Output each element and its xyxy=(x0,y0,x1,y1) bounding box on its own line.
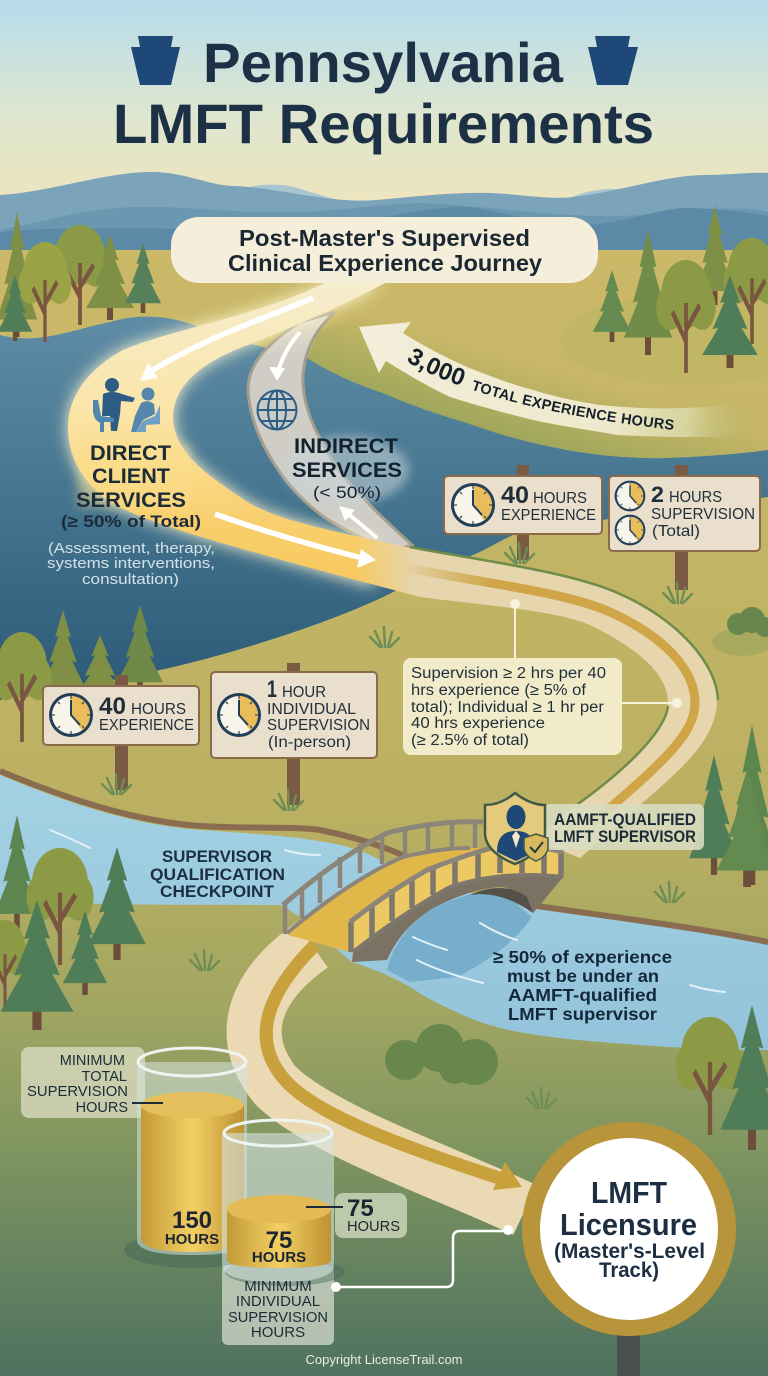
sign text: 40 xyxy=(501,482,529,509)
banner: journey heading: Clinical Experience Journey xyxy=(228,250,542,276)
label: indirect services xyxy=(285,435,409,504)
icon: keystone left xyxy=(131,36,180,85)
callout: supervision ratio: hrs experience (≥ 5% of xyxy=(411,682,587,699)
lower trail arrowhead xyxy=(493,1162,522,1190)
icon: globe xyxy=(258,390,296,430)
sign text: 1 xyxy=(267,676,277,703)
sign text: 40 xyxy=(99,693,126,720)
trail green edge xyxy=(410,547,718,804)
title line 1: Pennsylvania xyxy=(203,31,564,94)
label: 75 hours xyxy=(306,1193,407,1238)
bridge arch xyxy=(352,875,563,962)
callout: supervision ratio: 40 hrs experience xyxy=(411,715,545,732)
label: minimum total supervision hours: TOTAL xyxy=(82,1069,127,1085)
bridge shadow on water xyxy=(387,890,532,982)
grass tufts xyxy=(190,627,684,1108)
label: minimum individual supervision hours xyxy=(228,1278,328,1341)
licensure text: Track) xyxy=(599,1258,659,1282)
label: direct client services xyxy=(47,442,215,588)
label: direct client services: CLIENT xyxy=(92,465,170,488)
sign text xyxy=(501,482,596,524)
banner: journey heading xyxy=(171,217,598,283)
direct arrow right xyxy=(215,514,376,568)
river bank xyxy=(0,771,768,942)
trees: upper left xyxy=(0,212,161,342)
sign text xyxy=(99,693,194,734)
indirect services path xyxy=(248,312,412,552)
label: minimum individual supervision hours: MINIMUM xyxy=(244,1278,312,1295)
icon: clock xyxy=(49,693,93,737)
sign text: HOURS xyxy=(533,490,587,507)
sign: 40 hours experience (lower) xyxy=(43,675,199,790)
label: 50 percent of experience: LMFT supervisor xyxy=(508,1004,657,1024)
callout: supervision ratio: Supervision ≥ 2 hrs per 40 xyxy=(411,665,606,682)
sign text: HOURS xyxy=(131,701,186,718)
lower trail xyxy=(254,945,525,1210)
label: 75 hours: HOURS xyxy=(347,1218,400,1235)
label: supervisor qualification checkpoint: QUALIFICATION xyxy=(150,866,285,884)
trees: lower right xyxy=(675,1005,768,1150)
label: minimum individual supervision hours: HOURS xyxy=(251,1324,305,1341)
label: minimum total supervision hours xyxy=(27,1053,163,1116)
connector lines for callout xyxy=(510,600,682,708)
sign text: 2 xyxy=(651,482,664,507)
licensure text: LMFT xyxy=(591,1175,667,1210)
icon: keystone right xyxy=(588,36,638,85)
back railing xyxy=(283,822,483,934)
label: direct client services: DIRECT xyxy=(90,442,171,465)
label: aamft supervisor xyxy=(544,804,704,850)
licensure text xyxy=(554,1175,705,1282)
banner: journey heading: Post-Master's Supervised xyxy=(239,225,530,251)
label: direct client services: SERVICES xyxy=(76,489,186,512)
copyright: Copyright LicenseTrail.com xyxy=(305,1352,463,1367)
title line 2: LMFT Requirements xyxy=(113,92,654,155)
value: 150 xyxy=(172,1207,212,1234)
icon: clock bottom xyxy=(615,515,645,545)
licensure text: (Master's-Level xyxy=(554,1239,705,1263)
direct services path xyxy=(68,283,420,597)
label: 50 percent of experience: must be under an xyxy=(507,966,659,986)
icon: clock xyxy=(217,693,261,737)
lake xyxy=(0,317,768,700)
direct services examples: (Assessment, therapy, xyxy=(48,541,215,557)
indirect arrow down xyxy=(269,332,300,381)
label: direct client services: (≥ 50% of Total) xyxy=(61,513,201,531)
sign text: (Total) xyxy=(652,523,700,540)
arrow: 3,000 total experience hours xyxy=(359,322,729,437)
title block xyxy=(113,31,654,155)
sign text: SUPERVISION xyxy=(651,506,755,523)
sign text: HOUR xyxy=(282,684,326,701)
green hill under total arrow xyxy=(307,300,768,458)
label: supervisor qualification checkpoint: SUPERVISOR xyxy=(162,848,272,866)
shield check badge xyxy=(524,834,548,861)
bushes xyxy=(385,607,768,1085)
sign: 2 hours supervision total xyxy=(609,465,760,590)
licensure text: Licensure xyxy=(560,1207,697,1242)
icon: counseling session xyxy=(93,378,160,432)
sky background xyxy=(0,0,768,260)
icon: clock xyxy=(451,483,495,527)
sign text: EXPERIENCE xyxy=(501,507,596,524)
sign text: HOURS xyxy=(669,489,722,506)
bridge deck xyxy=(288,848,510,953)
icon: shield with supervisor xyxy=(485,793,548,864)
sign text: EXPERIENCE xyxy=(99,717,194,734)
label: minimum total supervision hours: SUPERVISION xyxy=(27,1084,128,1100)
cylinder: 150 hours: HOURS xyxy=(165,1231,219,1248)
label box: minimum total supervision hours xyxy=(21,1047,145,1118)
mountains xyxy=(0,172,768,270)
label box: minimum individual supervision hours xyxy=(222,1265,334,1345)
callout: supervision ratio: (≥ 2.5% of total) xyxy=(411,732,529,749)
label: supervisor qualification checkpoint xyxy=(150,848,285,901)
direct services examples xyxy=(47,541,215,588)
arrow label: 3,000 TOTAL EXPERIENCE HOURS xyxy=(408,348,674,430)
sign: 40 hours experience (upper) xyxy=(444,465,602,560)
label: 50 percent of experience: ≥ 50% of experience xyxy=(493,947,672,967)
main trail: upper xyxy=(350,535,718,858)
label: 75 hours: 75 xyxy=(347,1195,374,1222)
trees: right of trail xyxy=(689,725,768,887)
sign: 1 hour individual supervision xyxy=(211,663,377,805)
label: minimum total supervision hours: HOURS xyxy=(76,1100,128,1116)
direct services examples: consultation) xyxy=(82,572,179,588)
indirect arrow up xyxy=(339,506,377,538)
label: minimum individual supervision hours: INDIVIDUAL xyxy=(236,1293,320,1310)
front railing xyxy=(350,845,563,952)
label: 50 percent of experience xyxy=(493,947,672,1024)
label: aamft supervisor: LMFT SUPERVISOR xyxy=(554,828,696,846)
trees: middle left xyxy=(0,605,163,742)
direct arrow down xyxy=(140,298,313,381)
value: 75 xyxy=(266,1227,292,1254)
trail center stripe xyxy=(400,566,695,825)
sign post grass xyxy=(102,543,692,810)
label: indirect services: INDIRECT xyxy=(294,435,398,458)
trees: upper right xyxy=(593,205,768,373)
label: indirect services: (< 50%) xyxy=(313,484,381,502)
licensure sign post xyxy=(617,1330,640,1376)
callout: supervision ratio: total); Individual ≥ 1 hr per xyxy=(411,699,604,716)
cylinder: 75 hours xyxy=(222,1120,345,1286)
meadow hill right xyxy=(560,295,768,385)
label: indirect services: SERVICES xyxy=(292,459,402,482)
cylinder: 75 hours: HOURS xyxy=(252,1249,306,1266)
sign text xyxy=(651,482,755,540)
label: supervisor qualification checkpoint: CHECKPOINT xyxy=(160,883,274,901)
label: minimum individual supervision hours: SUPERVISION xyxy=(228,1309,328,1326)
label: minimum total supervision hours: MINIMUM xyxy=(60,1053,125,1069)
bridge xyxy=(283,822,563,962)
label: 50 percent of experience: AAMFT-qualified xyxy=(508,985,657,1005)
direct services examples: systems interventions, xyxy=(47,556,215,572)
sign text xyxy=(267,676,370,751)
cylinder: 150 hours xyxy=(124,1048,260,1268)
sign text: INDIVIDUAL xyxy=(267,701,356,718)
water ripples xyxy=(50,830,730,1035)
connector to licensure xyxy=(331,1225,513,1292)
callout: supervision ratio xyxy=(403,658,622,755)
sign text: SUPERVISION xyxy=(267,717,370,734)
trees: river left xyxy=(0,815,146,1030)
licensure badge xyxy=(522,1122,736,1336)
icon: clock top xyxy=(615,481,645,511)
arch recess xyxy=(470,888,533,913)
river xyxy=(0,775,768,1050)
label: aamft supervisor: AAMFT-QUALIFIED xyxy=(554,811,696,829)
sign text: (In-person) xyxy=(268,734,351,751)
